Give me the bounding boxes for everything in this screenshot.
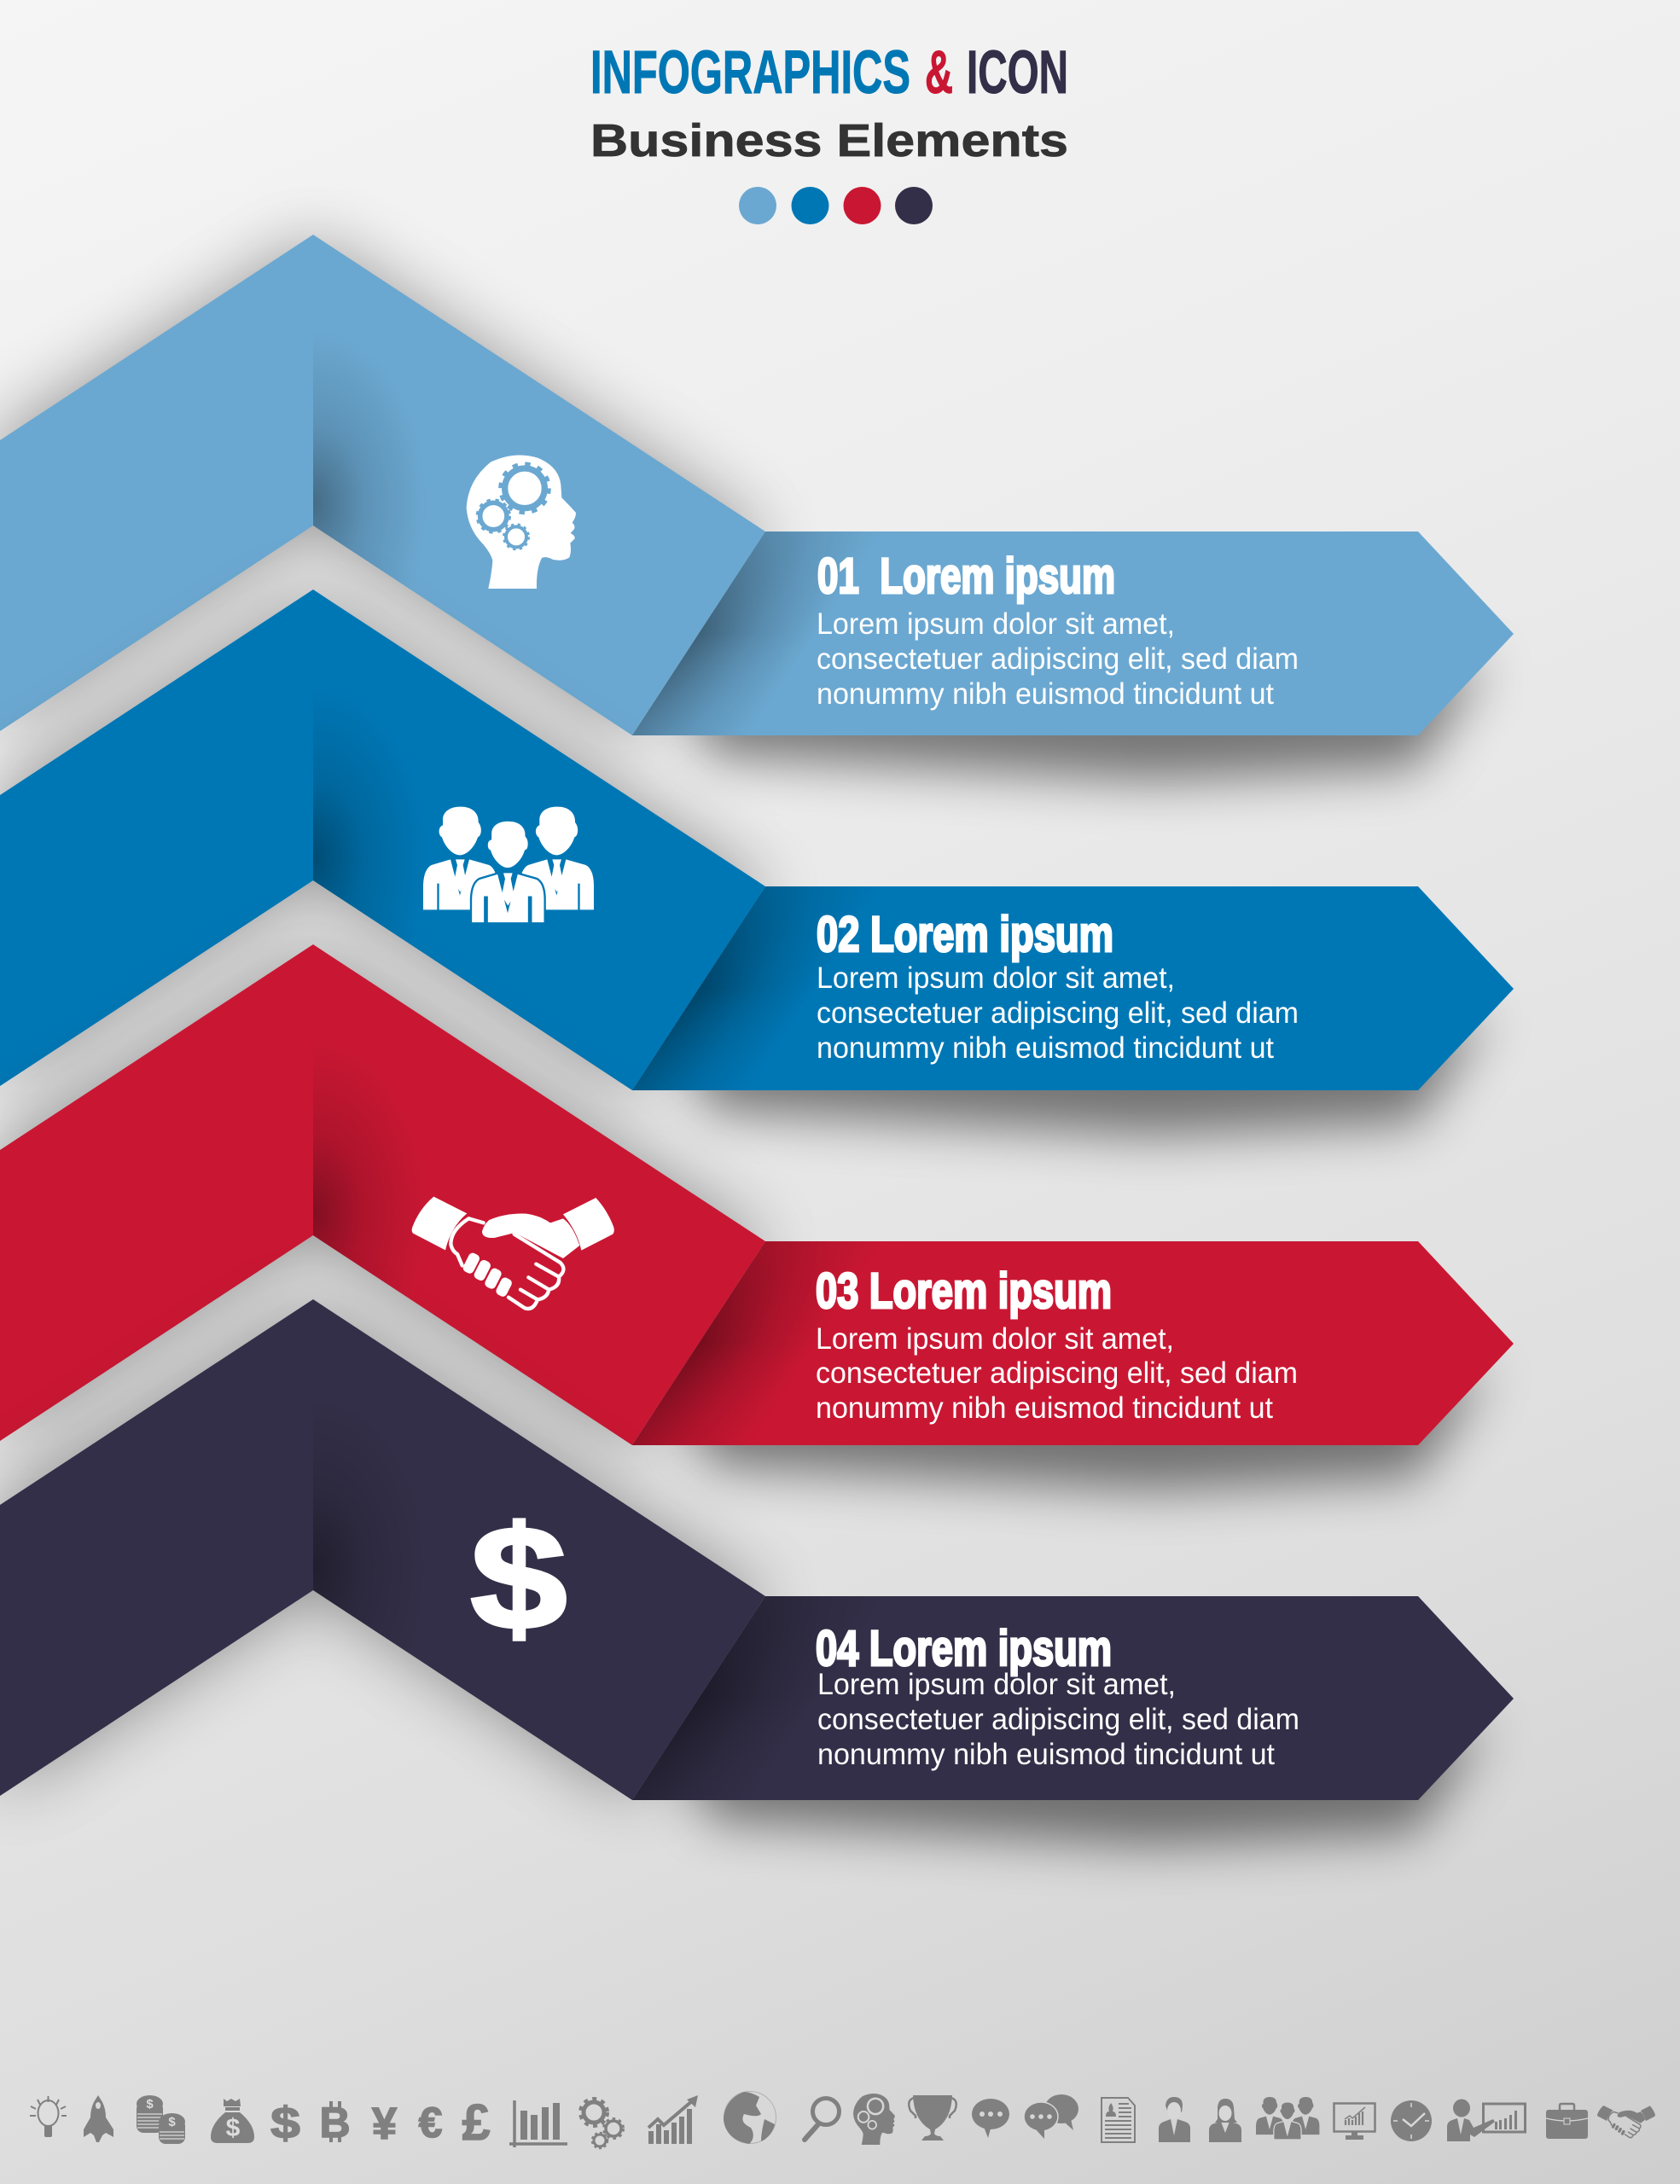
icon: presenter with chart [1447,2099,1526,2141]
icon: gears [580,2099,623,2148]
text block 01: consectetuer adipiscing elit, sed diam [817,642,1299,676]
icon: money bag: $ [226,2114,241,2142]
icon: clock [1391,2100,1432,2141]
icon: coin stacks [137,2095,185,2144]
icon: bar chart [509,2100,567,2147]
icon: coin stacks: $ [168,2115,176,2129]
ribbon shape 02 [0,590,1514,1136]
icon: team of three [423,807,594,923]
icon: magnifier [805,2099,840,2140]
heading 03: 03 Lorem ipsum [816,1263,1112,1319]
heading 01: 01 Lorem ipsum [817,549,1115,604]
panel: step 01 [0,235,1514,781]
text block 02: Lorem ipsum dolor sit amet, [817,961,1175,995]
icon: monitor chart [1334,2104,1375,2140]
heading 02: 02 Lorem ipsum [817,907,1113,962]
text block 02 [817,961,1299,1065]
icon: speech bubble [972,2099,1009,2138]
text block 03: consectetuer adipiscing elit, sed diam [816,1356,1298,1390]
heading 04: 04 Lorem ipsum [816,1621,1112,1676]
icon: growth chart [648,2095,698,2144]
text block 04: nonummy nibh euismod tincidunt ut [817,1738,1275,1771]
text block 03: Lorem ipsum dolor sit amet, [816,1322,1174,1356]
icon: coin stacks: $ [146,2097,154,2111]
icon: pound: £ [462,2094,491,2151]
title: INFOGRAPHICS [590,39,910,107]
icon: head small [853,2094,895,2145]
text block 04: consectetuer adipiscing elit, sed diam [817,1703,1299,1736]
colour dots [739,187,933,224]
icon: light bulb [30,2096,67,2137]
icon: trophy [909,2095,956,2140]
icon: dollar sign: $ [471,1496,567,1660]
panel: step 03 [0,944,1514,1490]
icon: rocket [84,2095,113,2142]
ribbon shape 01 [0,235,1514,781]
title: & [925,39,953,107]
text block 02: nonummy nibh euismod tincidunt ut [817,1031,1274,1065]
icon: money bag [211,2099,254,2143]
text block 01 [817,607,1299,711]
icon: dollar: $ [270,2099,300,2148]
icon: euro: € [419,2099,442,2146]
text block 02: consectetuer adipiscing elit, sed diam [817,996,1299,1030]
icon: handshake [412,1197,614,1309]
icon: handshake small [1597,2106,1655,2138]
text block 04 [817,1668,1299,1771]
text block 03: nonummy nibh euismod tincidunt ut [816,1391,1273,1425]
text block 01: nonummy nibh euismod tincidunt ut [817,677,1274,711]
title: ICON [967,39,1068,107]
panel: step 04 [0,1299,1514,1845]
icon: resume [1102,2098,1135,2142]
icon: bitcoin: B [319,2099,351,2146]
ribbon shape 04 [0,1299,1514,1845]
icon: briefcase [1546,2104,1588,2139]
icon: two speech bubbles [1024,2094,1078,2139]
icon row [30,2092,1655,2151]
icon: head with gears [467,455,576,589]
icon: yen: ¥ [372,2099,398,2149]
icon: team small [1256,2097,1319,2140]
panel: step 02 [0,590,1514,1136]
ribbon shape 03 [0,944,1514,1490]
icon: businessman [1159,2097,1190,2142]
icon: businesswoman [1209,2099,1241,2142]
text block 04: Lorem ipsum dolor sit amet, [817,1668,1176,1701]
text block 03 [816,1322,1298,1425]
icon: globe [724,2092,776,2144]
subtitle: Business Elements [590,115,1068,166]
text block 01: Lorem ipsum dolor sit amet, [817,607,1175,641]
